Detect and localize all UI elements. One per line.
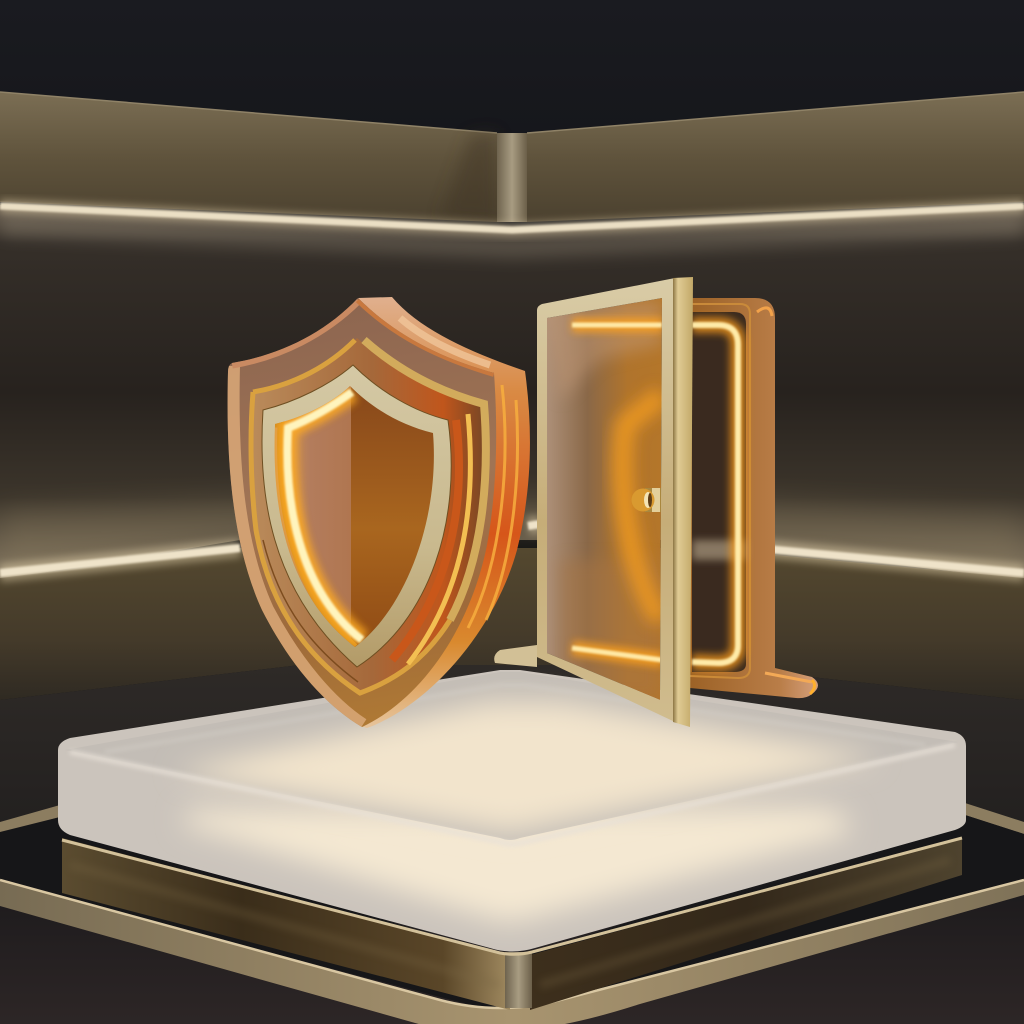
shield inner panel — [270, 380, 436, 650]
pedestal edge highlight — [70, 745, 955, 844]
door glass neon — [572, 325, 662, 660]
door left foot — [494, 645, 537, 667]
floor behind pedestal — [0, 665, 1024, 880]
tray rim, front — [0, 880, 1024, 1024]
shield upper bevel — [232, 300, 358, 364]
shield front face — [228, 298, 496, 727]
shield reflection in door — [622, 395, 662, 620]
door glass — [540, 298, 662, 700]
upper light strip — [0, 206, 1024, 230]
door neon tube — [692, 325, 738, 663]
shield side streaks — [468, 385, 517, 628]
shield side thickness — [358, 297, 530, 728]
upper gold wall band — [0, 92, 1024, 222]
door foot highlight — [765, 673, 812, 682]
door frame — [537, 278, 675, 722]
frosted pedestal — [58, 670, 966, 952]
door edge — [673, 277, 693, 727]
back wall — [0, 205, 1024, 580]
shield inner gold frame — [262, 365, 451, 667]
shield neon glow — [287, 392, 362, 640]
shield left bevel — [232, 366, 362, 726]
icon: shield — [228, 297, 530, 728]
pedestal body — [58, 670, 966, 952]
lower light strip — [0, 524, 1024, 573]
background: dark ceiling — [0, 0, 1024, 300]
shield middle ring fill — [251, 338, 488, 693]
front floor — [0, 880, 1024, 1024]
icon: door — [494, 277, 818, 727]
pedestal top face — [65, 672, 958, 840]
lower gold wall band — [0, 548, 1024, 700]
pedestal metal base — [62, 838, 962, 1010]
tray interior — [0, 815, 1024, 1010]
door back plate — [690, 298, 818, 698]
pedestal front glow — [184, 808, 848, 922]
pedestal inset line — [105, 685, 925, 752]
door knob — [632, 488, 661, 512]
pedestal top glow — [175, 702, 880, 832]
tray rim, back corners — [0, 803, 1024, 834]
shield middle ring strokes — [251, 340, 486, 693]
